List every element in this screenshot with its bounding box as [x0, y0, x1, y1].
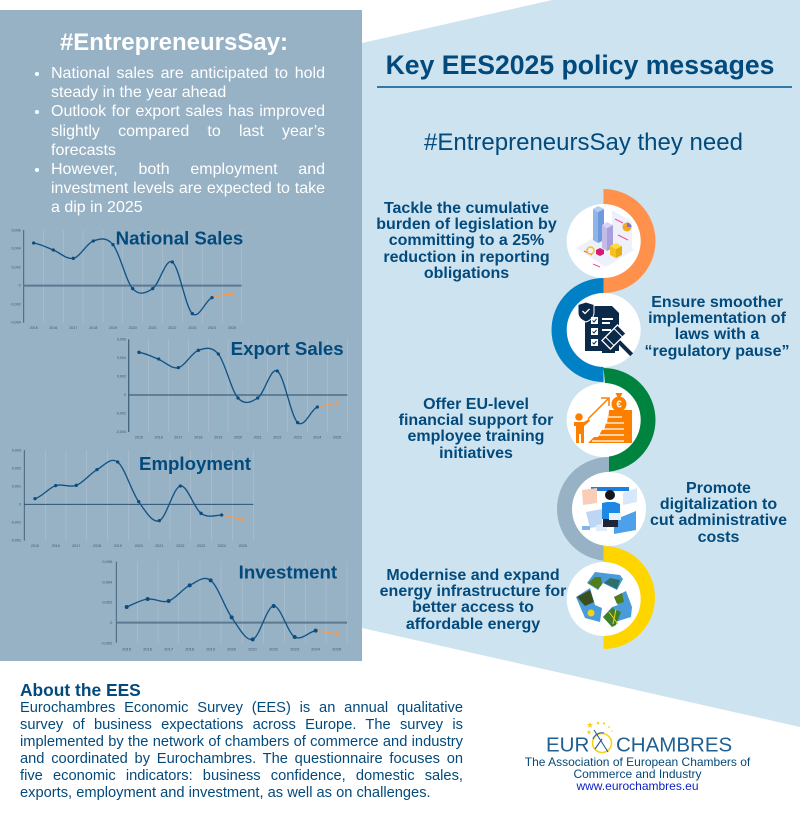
message 5: better access to: [412, 599, 534, 616]
chart: employment: Employment: [139, 453, 251, 474]
message 5: affordable energy: [406, 616, 540, 633]
message 1: Tackle the cumulative: [384, 200, 549, 217]
chart: employment: 2021: [155, 544, 163, 548]
chart: employment: -0,002: [11, 539, 21, 543]
message 1: committing to a 25%: [389, 232, 544, 249]
chart: employment: [11, 448, 253, 548]
chart: employment: 0,002: [12, 466, 21, 470]
chart: investment: 2019: [206, 646, 216, 651]
icon: bar chart report: [576, 206, 634, 267]
message 5: [380, 567, 566, 633]
panel: entrepreneurs say: [0, 10, 362, 661]
message 3: employee training: [408, 428, 544, 445]
message 1: reduction in reporting: [383, 249, 550, 266]
chart: national sales: 2020: [129, 326, 137, 330]
message 2: [645, 294, 789, 360]
main heading: Key EES2025 policy messages: [386, 50, 774, 80]
chart: investment: 2015: [122, 646, 132, 651]
message 3: Offer EU-level: [423, 396, 529, 413]
chart: investment: 2016: [143, 646, 153, 651]
chart: investment: 0,006: [102, 559, 113, 564]
chart: investment: 2018: [185, 646, 195, 651]
icon: digital worker: [582, 487, 637, 534]
subheading: #EntrepreneursSay they need: [424, 129, 743, 156]
message 3: initiatives: [439, 445, 513, 462]
website link: www.eurochambres.eu: [576, 779, 699, 793]
ring: yellow: [567, 546, 655, 649]
message 2: implementation of: [648, 310, 786, 327]
chart: national sales: [10, 228, 243, 330]
message 2: Ensure smoother: [651, 294, 783, 311]
bullet list: [35, 65, 325, 216]
message 5: Modernise and expand: [386, 567, 560, 584]
heading rule: [377, 86, 792, 88]
chart: investment: 0,004: [102, 579, 113, 584]
chart: export sales: 0,002: [117, 375, 126, 379]
chart: export sales: 2015: [135, 435, 143, 439]
chart: national sales: 2025: [228, 326, 236, 330]
chart: export sales: Export Sales: [231, 338, 344, 359]
chart: investment: 2024: [311, 646, 321, 651]
message 4: [650, 480, 787, 546]
about text: Eurochambres Economic Survey (EES) is an annual qualitative survey of business expectations across Europe. The survey is implemented by the network of chambers of commerce and industry and coordinated by Eurochambres. The questionnaire focuses on five economic indicators: business confidence, domestic sales, exports, employment and investment, as well as on challenges.: [20, 700, 463, 801]
message 2: laws with a: [675, 326, 759, 343]
message 2: “regulatory pause”: [645, 343, 789, 360]
chart: export sales: [116, 338, 347, 439]
chart: employment: 2016: [52, 544, 60, 548]
ring: green: [567, 368, 656, 472]
chart: national sales: National Sales: [116, 228, 243, 249]
chart: national sales: 2022: [168, 326, 176, 330]
message 4: costs: [698, 529, 739, 546]
chart: investment: 2025: [332, 646, 342, 651]
chart: export sales: 0,006: [117, 338, 126, 342]
logo wordmark: CHAMBRES: [616, 734, 732, 756]
chart: investment: 0: [110, 620, 113, 625]
chart: export sales: -0,004: [116, 430, 126, 434]
chart: export sales: 2024: [313, 435, 321, 439]
message ring chain: [552, 189, 656, 649]
message 3: [398, 396, 554, 462]
message 4: cut administrative: [650, 512, 787, 529]
chart: investment: Investment: [239, 562, 337, 583]
message 5: energy infrastructure for: [380, 583, 566, 600]
chart: employment: 2018: [93, 544, 101, 548]
chart: export sales: 2017: [174, 435, 182, 439]
message 1: obligations: [424, 265, 509, 282]
panel heading: #EntrepreneursSay:: [60, 29, 288, 56]
chart: national sales: 2018: [89, 326, 97, 330]
icon: stairs to growth: €: [616, 400, 622, 410]
chart: national sales: -0,002: [10, 302, 21, 306]
chart: employment: 2019: [114, 544, 122, 548]
message 4: digitalization to: [660, 496, 777, 513]
chart: investment: 0,002: [102, 600, 113, 605]
bullet list: National sales are anticipated to hold steady in the year ahead: [51, 65, 325, 101]
chart: investment: 2017: [164, 646, 174, 651]
logo stars: [586, 722, 613, 734]
chart: export sales: 2019: [214, 435, 222, 439]
chart: employment: -0,001: [11, 520, 21, 524]
chart: employment: 0,001: [12, 484, 21, 488]
chart: employment: 2023: [197, 544, 205, 548]
ring: blue: [552, 278, 641, 382]
about heading: About the EES: [20, 680, 141, 700]
chart: employment: 0,003: [12, 448, 21, 452]
logo tagline: [525, 755, 750, 781]
logo wordmark: EUR: [546, 734, 589, 756]
chart: export sales: 2016: [155, 435, 163, 439]
chart: national sales: -0,004: [10, 321, 21, 325]
chart: employment: 2024: [218, 544, 226, 548]
logo ring: [592, 730, 612, 752]
message 1: [376, 200, 557, 282]
chart: national sales: 2019: [109, 326, 117, 330]
chart: export sales: 2023: [294, 435, 302, 439]
logo tagline: The Association of European Chambers of: [525, 755, 750, 769]
chart: employment: 2020: [135, 544, 143, 548]
chart: national sales: 2021: [149, 326, 157, 330]
charts group: [10, 228, 348, 651]
chart: investment: -0,002: [101, 640, 113, 645]
chart: national sales: 2017: [69, 326, 77, 330]
chart: export sales: 0: [124, 393, 126, 397]
icon: clipboard and gavel: [578, 302, 639, 362]
chart: national sales: 2023: [188, 326, 196, 330]
bullet list: Outlook for export sales has improved slightly compared to last year’s forecasts: [51, 103, 325, 159]
ring: grey: [557, 457, 646, 561]
chart: investment: [101, 559, 347, 651]
chart: investment: 2023: [290, 646, 300, 651]
chart: national sales: 0: [19, 284, 21, 288]
message 4: Promote: [686, 480, 751, 497]
chart: national sales: 0,002: [12, 265, 21, 269]
logo tagline: Commerce and Industry: [573, 767, 702, 781]
message 1: burden of legislation by: [376, 216, 557, 233]
chart: employment: 2025: [239, 544, 247, 548]
chart: national sales: 0,004: [12, 247, 21, 251]
chart: export sales: 0,004: [117, 356, 126, 360]
message 3: financial support for: [399, 412, 553, 429]
ring: orange: [567, 189, 656, 293]
chart: export sales: 2020: [234, 435, 242, 439]
icon: recycling energy: [576, 572, 632, 627]
chart: national sales: 0,006: [12, 228, 21, 232]
chart: employment: 2015: [31, 544, 39, 548]
chart: investment: 2022: [269, 646, 279, 651]
chart: export sales: 2021: [254, 435, 262, 439]
chart: export sales: 2018: [194, 435, 202, 439]
chart: export sales: 2022: [273, 435, 281, 439]
bullet list: However, both employment and investment levels are expected to take a dip in 2025: [51, 161, 325, 216]
chart: investment: 2020: [227, 646, 237, 651]
chart: national sales: 2016: [49, 326, 57, 330]
chart: export sales: -0,002: [116, 412, 126, 416]
logo: Eurochambres: [525, 722, 750, 793]
chart: national sales: 2024: [208, 326, 216, 330]
chart: employment: 0: [19, 502, 21, 506]
chart: export sales: 2025: [333, 435, 341, 439]
chart: national sales: 2015: [30, 326, 38, 330]
chart: employment: 2022: [176, 544, 184, 548]
chart: employment: 2017: [72, 544, 80, 548]
chart: investment: 2021: [248, 646, 258, 651]
